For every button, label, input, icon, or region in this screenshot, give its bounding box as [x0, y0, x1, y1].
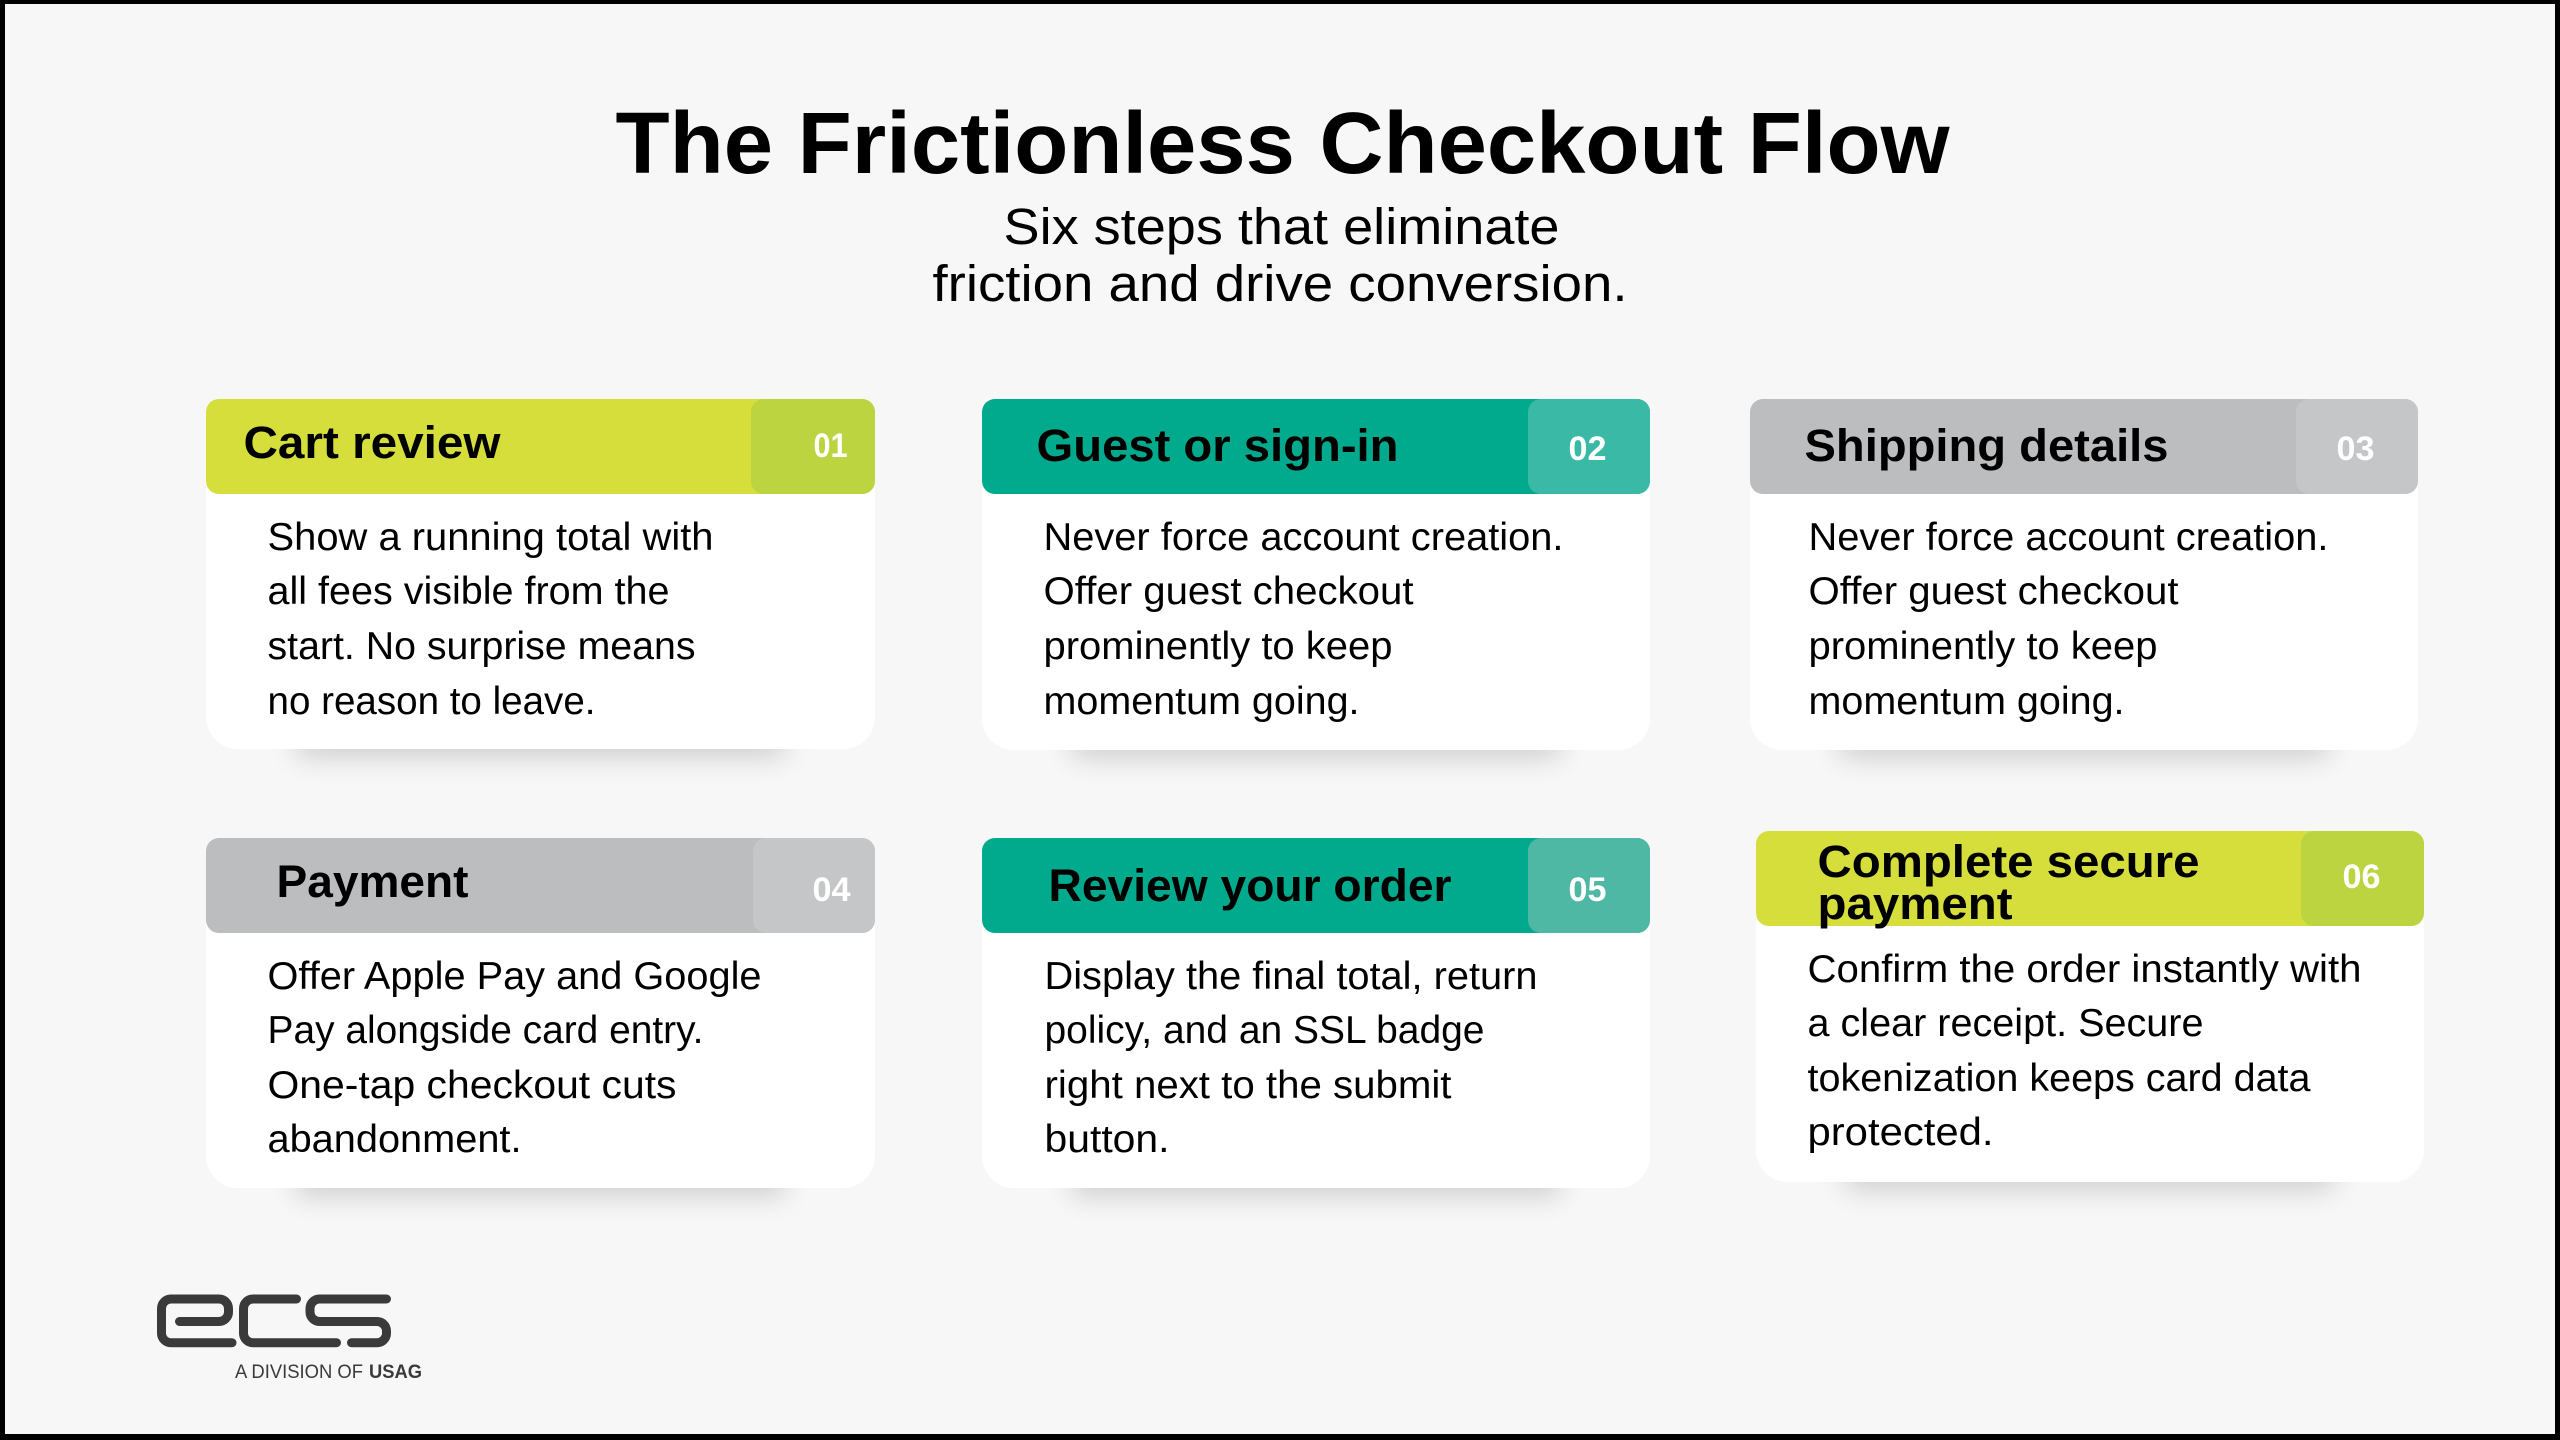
- subtitle: friction and drive conversion.: [932, 255, 1628, 312]
- step 6 body text: Confirm the order instantly with: [1808, 948, 2362, 991]
- step 3 body text: Never force account creation.: [1808, 516, 2328, 559]
- step 4 body text: Pay alongside card entry.: [268, 1009, 704, 1052]
- subtitle: Six steps that eliminate: [1004, 198, 1560, 255]
- step 4 body text: Offer Apple Pay and Google: [268, 955, 762, 998]
- step 1 body text: start. No surprise means: [268, 625, 696, 668]
- step 3 body text: prominently to keep: [1808, 625, 2158, 668]
- step 1 body text: [268, 516, 714, 723]
- step 2 header bar: [982, 399, 1650, 494]
- step 2 body text: [1044, 516, 1564, 723]
- step 4 heading: Payment: [276, 856, 469, 907]
- step 3 header bar: [1750, 399, 2418, 494]
- step 2 body text: Offer guest checkout: [1044, 570, 1414, 613]
- title: The Frictionless Checkout Flow: [616, 95, 1950, 192]
- step 5 body text: right next to the submit: [1044, 1064, 1452, 1107]
- step 1 header bar: [206, 399, 875, 494]
- step 5 number block: [1528, 838, 1650, 933]
- step 6 body text: protected.: [1808, 1111, 1994, 1154]
- step 5 body text: [1044, 955, 1538, 1161]
- panel: step 5 review your order: [982, 838, 1650, 1196]
- logo tagline: USAG: [369, 1362, 422, 1383]
- step 6 heading: [1818, 836, 2200, 929]
- step 6 heading: Complete secure: [1818, 836, 2200, 887]
- panel: step 3 shipping details: [1750, 399, 2418, 758]
- step 4 body text: abandonment.: [268, 1118, 522, 1161]
- step 4 number block: [753, 838, 875, 933]
- step 4 number block: 04: [812, 871, 851, 909]
- icon: ecs wordmark: [162, 1299, 386, 1343]
- step 1 number block: 01: [814, 427, 848, 465]
- step 6 heading: payment: [1818, 878, 2013, 929]
- step 3 number block: 03: [2336, 430, 2374, 468]
- logo: ecs, a division of USAG: [162, 1299, 422, 1383]
- step 2 number block: [1528, 399, 1650, 494]
- step 3 body text: [1808, 516, 2328, 723]
- step 3 body text: Offer guest checkout: [1808, 570, 2179, 613]
- panel: step 2 guest or sign-in: [982, 399, 1650, 758]
- step 1 body text: no reason to leave.: [268, 680, 596, 723]
- step 2 body text: Never force account creation.: [1044, 516, 1564, 559]
- step 3 number block: [2296, 399, 2418, 494]
- step 6 header bar: [1756, 831, 2424, 926]
- step 1 heading: Cart review: [244, 417, 502, 468]
- step 4 body text: [268, 955, 762, 1161]
- panel: step 4 payment: [206, 838, 875, 1196]
- step 3 body text: momentum going.: [1808, 680, 2124, 723]
- step 4 body text: One-tap checkout cuts: [268, 1064, 676, 1107]
- step 6 number block: 06: [2342, 858, 2380, 896]
- subtitle: [932, 198, 1628, 312]
- step 4 header bar: [206, 838, 875, 933]
- step 5 body text: policy, and an SSL badge: [1044, 1009, 1484, 1052]
- step 5 body text: button.: [1044, 1118, 1170, 1161]
- step 5 body text: Display the final total, return: [1044, 955, 1538, 998]
- step 6 number block: [2301, 831, 2424, 926]
- panel: step 1 cart review: [206, 399, 875, 757]
- step 1 body text: Show a running total with: [268, 516, 714, 559]
- step 5 number block: 05: [1568, 871, 1606, 909]
- step 5 heading: Review your order: [1048, 860, 1452, 911]
- step 1 body text: all fees visible from the: [268, 570, 670, 613]
- step 6 body text: [1808, 948, 2362, 1154]
- step 2 heading: Guest or sign-in: [1036, 420, 1398, 471]
- step 2 body text: prominently to keep: [1044, 625, 1392, 668]
- step 3 heading: Shipping details: [1804, 420, 2168, 471]
- step 6 body text: a clear receipt. Secure: [1808, 1002, 2204, 1045]
- step 5 header bar: [982, 838, 1650, 933]
- step 1 number block: [751, 399, 875, 494]
- logo tagline: A DIVISION OF: [235, 1362, 363, 1383]
- panel: step 6 complete secure payment: [1756, 831, 2424, 1190]
- step 6 body text: tokenization keeps card data: [1808, 1057, 2311, 1100]
- step 2 body text: momentum going.: [1044, 680, 1360, 723]
- step 2 number block: 02: [1568, 430, 1606, 468]
